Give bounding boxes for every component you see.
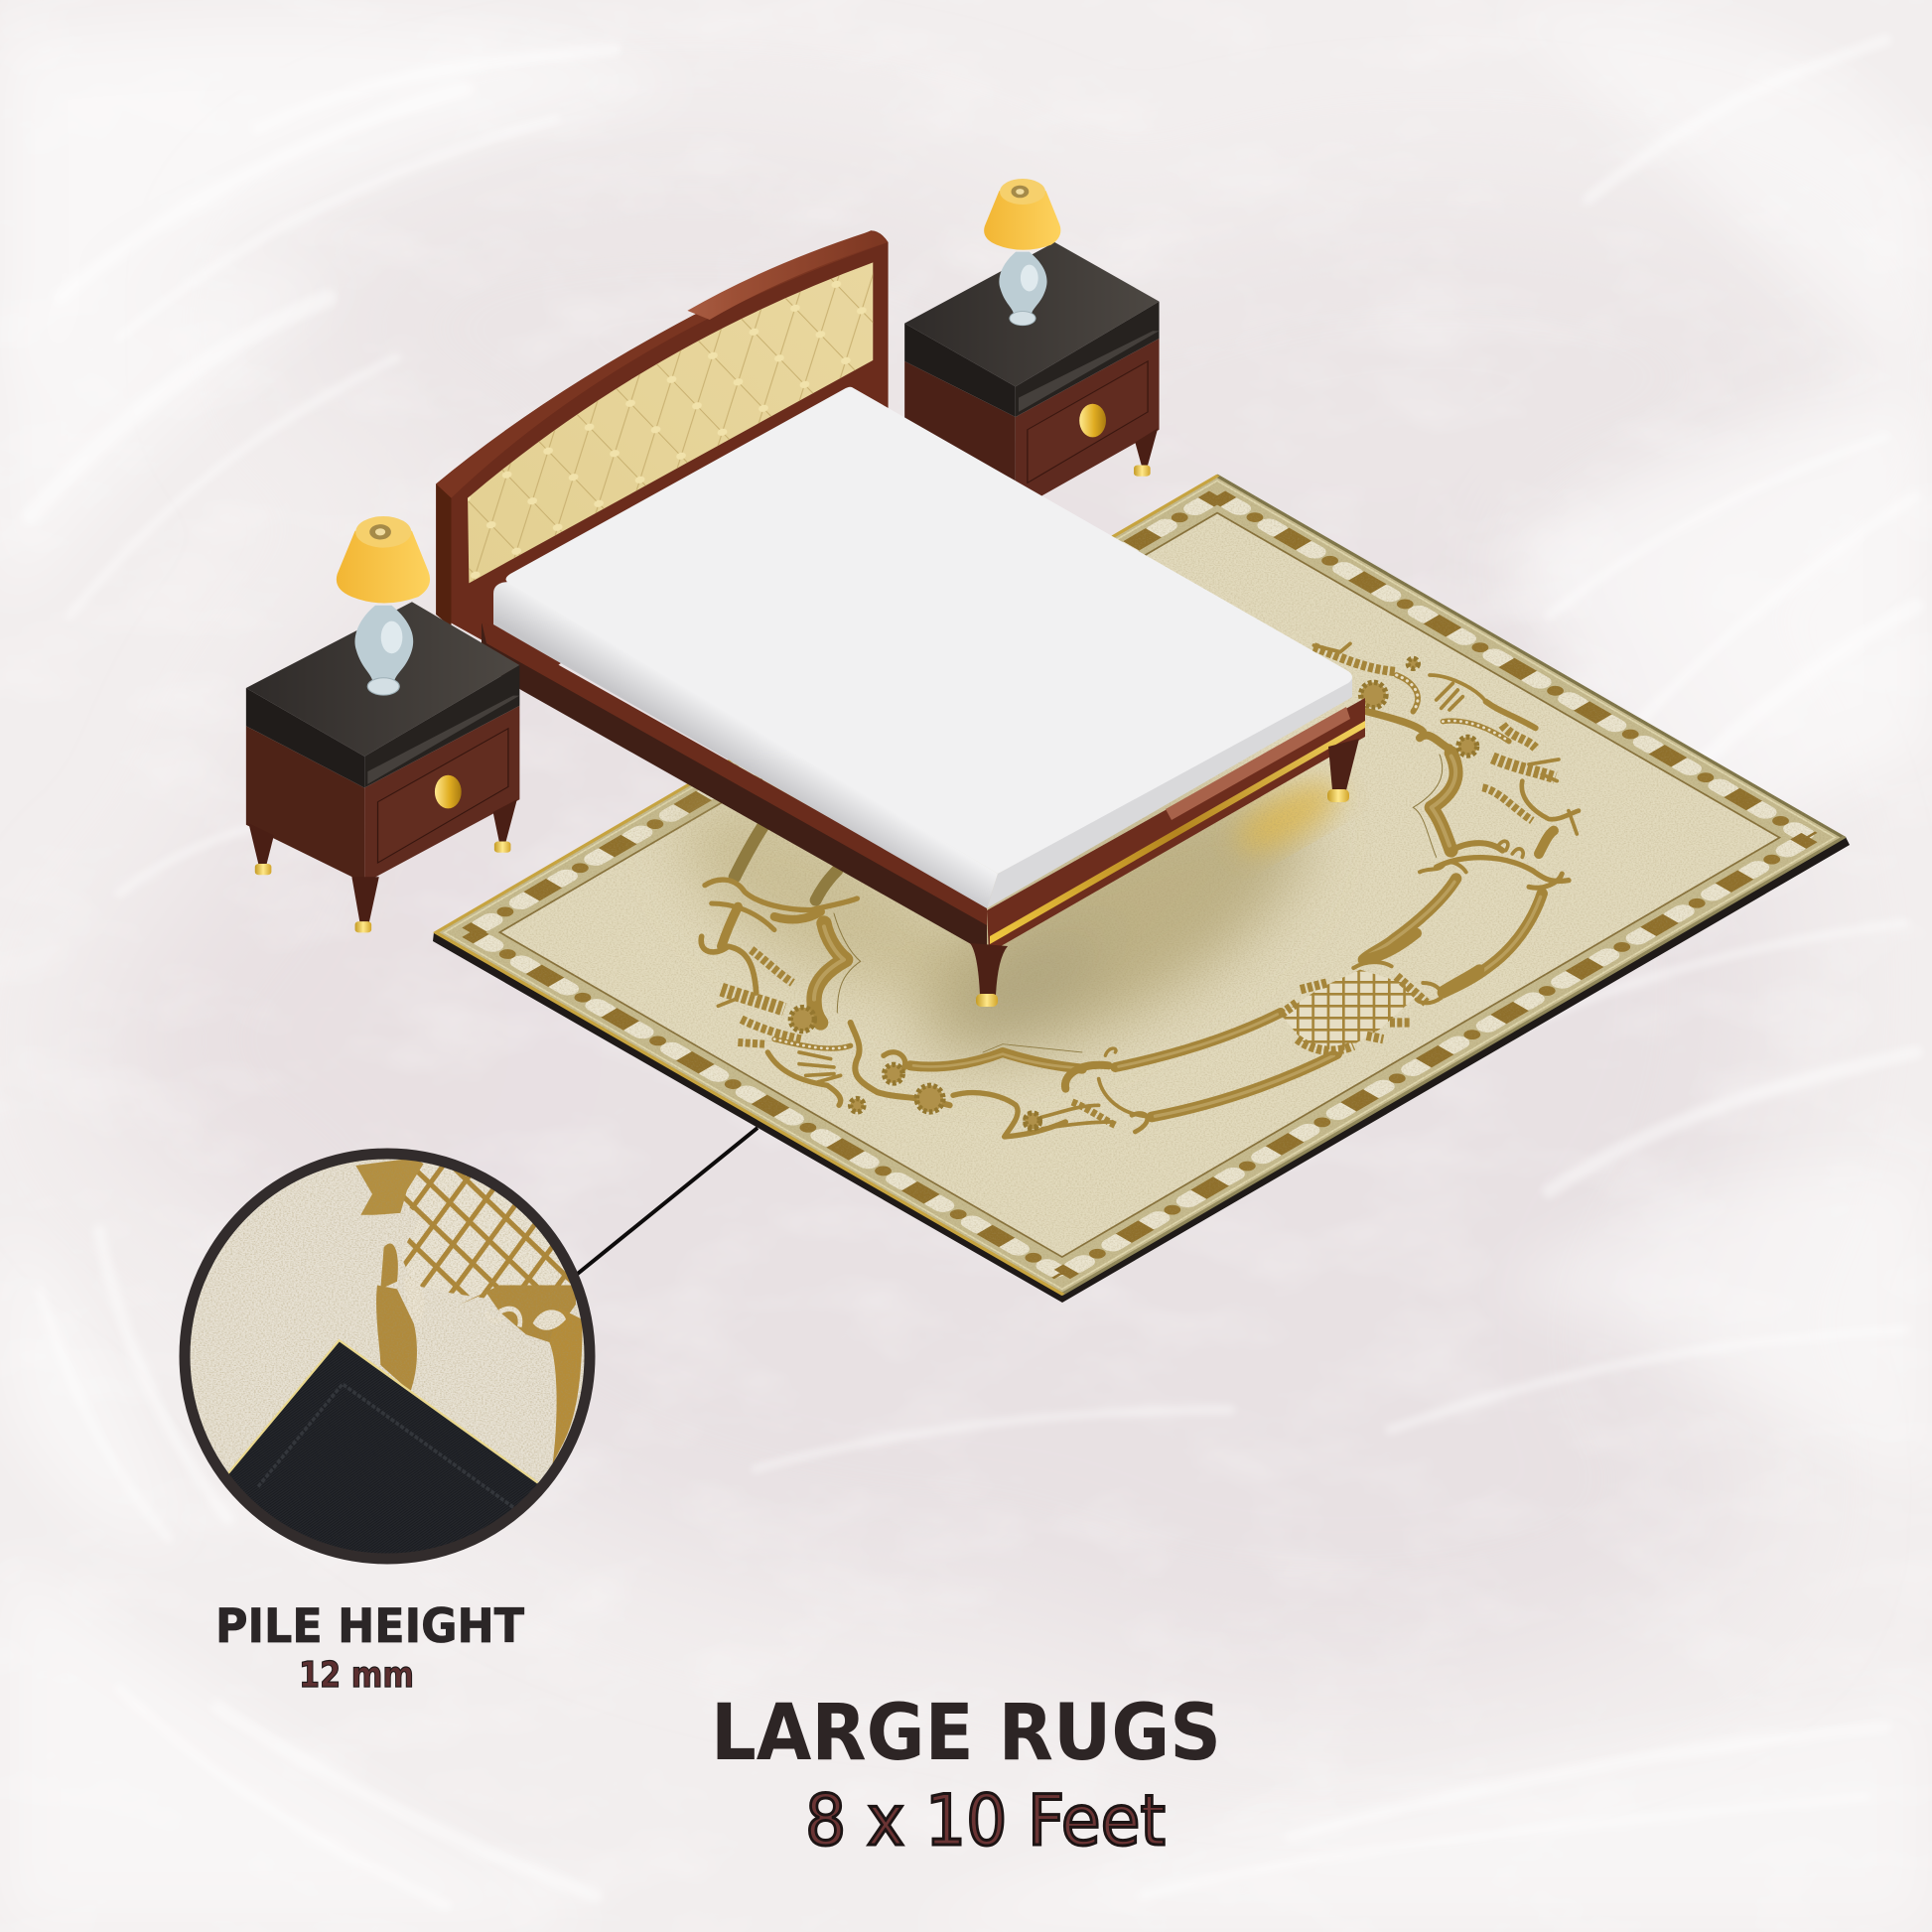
bed frame: long side rail (482, 621, 987, 953)
rug backing corner (228, 1342, 538, 1553)
label: pile height: PILE HEIGHT (215, 1599, 524, 1654)
bed (436, 230, 1365, 1007)
bed legs (970, 739, 1359, 1007)
lattice motif (403, 1166, 571, 1299)
rug shading under bed (427, 467, 1857, 1311)
connector line from rug to detail circle (574, 1128, 758, 1277)
headboard (436, 230, 889, 675)
label: 12 mm: 12 mm (299, 1655, 414, 1696)
detail circle: rug pile close-up (179, 1147, 606, 1578)
lamp: left (337, 516, 430, 695)
rug border and field (434, 475, 1846, 1296)
nightstand: right (904, 242, 1160, 510)
nightstand: left (246, 602, 519, 932)
rug dark backing edge (433, 837, 1850, 1303)
rug: 8 x 10 feet, isometric (427, 467, 1857, 1311)
rug ornament: left side scrolls (701, 824, 1082, 1137)
rug ornament: lower arcs and lattice cartouche (1026, 933, 1479, 1132)
bed frame: foot rail with gold strip (987, 698, 1365, 953)
mattress (493, 387, 1352, 908)
title: large rugs: LARGE RUGS (711, 1689, 1221, 1778)
headboard quilted tufting (468, 262, 873, 583)
subtitle: 8 x 10 feet: 8 x 10 Feet (805, 1780, 1166, 1862)
rug ornament: right side scrolls (1313, 643, 1579, 993)
lamp: right (984, 179, 1060, 326)
